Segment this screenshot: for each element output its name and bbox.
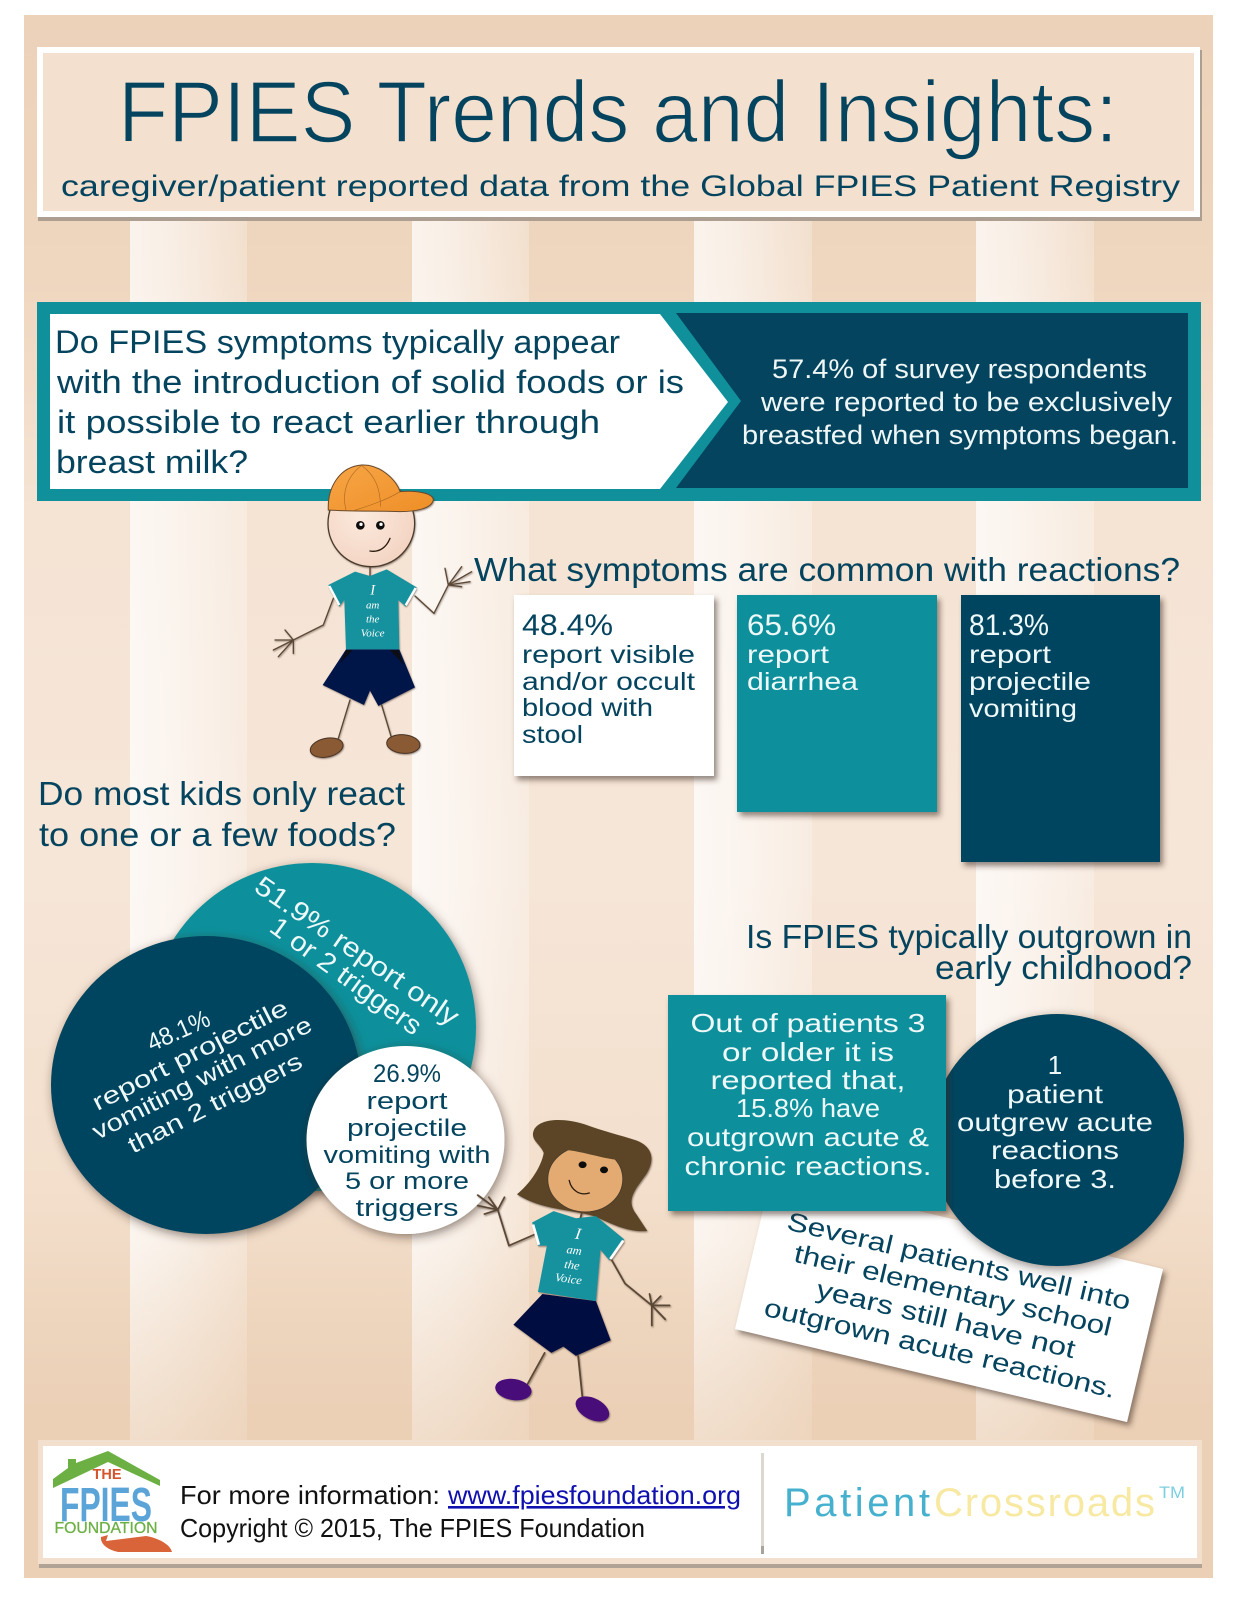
logo: The FPIES Foundation: FPIES (60, 1479, 152, 1532)
logo: PatientCrossroads (784, 1481, 1185, 1525)
illustration: girl character: am (566, 1242, 583, 1258)
bar: projectile vomiting 81.3% (961, 595, 1160, 862)
logo: PatientCrossroads: Crossroads (934, 1481, 1155, 1525)
question arrow panel: it possible to react earlier through (57, 404, 600, 440)
symptom bar chart (514, 595, 1160, 862)
logo: PatientCrossroads: Patient (784, 1481, 930, 1525)
heading: outgrown: Is FPIES typically outgrown in (746, 918, 1192, 955)
illustration: girl character: I (573, 1224, 584, 1243)
bar: projectile vomiting 81.3%: vomiting (969, 695, 1077, 723)
tilted note: elementary school years (735, 1176, 1163, 1422)
circle: 26.9% 5 or more triggers: vomiting with (324, 1142, 490, 1169)
illustration: boy character: I (369, 583, 376, 599)
circle: 51.9% 1 or 2 triggers (148, 863, 476, 1191)
box: 15.8% outgrown (668, 995, 946, 1211)
tilted note: elementary school years: outgrown acute reactions. (761, 1292, 1119, 1404)
circle: 26.9% 5 or more triggers: 5 or more (345, 1168, 469, 1195)
circle: 51.9% 1 or 2 triggers: 51.9% report only (249, 870, 465, 1032)
box: 15.8% outgrown: outgrown acute & (687, 1122, 929, 1152)
circle: 48.1% more than 2 triggers (51, 936, 361, 1234)
answer arrow panel (676, 313, 1188, 488)
logo: The FPIES Foundation: THE (92, 1466, 122, 1483)
footer panel (38, 1440, 1202, 1568)
contact text: Copyright © 2015, The FPIES Foundation (180, 1513, 645, 1543)
tilted note: elementary school years: Several patients well into (784, 1206, 1134, 1316)
circle: 1 patient outgrew before 3: reactions (991, 1135, 1119, 1165)
bar: blood in stool 48.4%: stool (522, 721, 583, 749)
box: 15.8% outgrown: reported that, (710, 1065, 906, 1095)
bar: blood in stool 48.4%: blood with (522, 694, 653, 722)
answer arrow panel: 57.4% of survey respondents (772, 354, 1147, 384)
heading: outgrown (746, 918, 1192, 986)
circle: 1 patient outgrew before 3: 1 (1048, 1050, 1062, 1080)
circle: 26.9% 5 or more triggers (306, 1046, 504, 1234)
bar: diarrhea 65.6% (737, 595, 937, 812)
circle: 26.9% 5 or more triggers: projectile (347, 1115, 467, 1142)
illustration: boy character: the (366, 614, 379, 626)
illustration: girl character (478, 1120, 670, 1427)
question arrow panel: Do FPIES symptoms typically appear (55, 324, 620, 360)
circle: 1 patient outgrew before 3: patient (1007, 1079, 1104, 1109)
circle: 26.9% 5 or more triggers: report (366, 1088, 448, 1115)
illustration: girl character: Voice (554, 1270, 583, 1287)
answer arrow panel: were reported to be exclusively (760, 387, 1173, 417)
bar: blood in stool 48.4%: report visible (522, 641, 695, 669)
illustration: boy character: am (366, 600, 379, 612)
box: 15.8% outgrown: 15.8% have (736, 1093, 880, 1123)
question arrow panel (50, 314, 728, 489)
question banner: breast milk (37, 302, 1201, 501)
illustration: girl character: the (563, 1257, 581, 1273)
box: 15.8% outgrown: Out of patients 3 (690, 1008, 926, 1038)
bar: diarrhea 65.6%: 65.6% (747, 609, 836, 642)
circle: 1 patient outgrew before 3 (930, 1014, 1184, 1266)
tilted note: elementary school years: their elementary school (791, 1238, 1115, 1342)
circle: 48.1% more than 2 triggers: 48.1% (143, 1005, 214, 1057)
title panel (37, 47, 1202, 221)
bar: blood in stool 48.4% (514, 595, 714, 776)
box: 15.8% outgrown: chronic reactions. (684, 1151, 932, 1181)
circle: 26.9% 5 or more triggers: triggers (356, 1195, 458, 1222)
circle: 26.9% 5 or more triggers: 26.9% (373, 1060, 441, 1088)
bar: projectile vomiting 81.3%: report (969, 641, 1051, 669)
circle: 1 patient outgrew before 3: before 3. (994, 1164, 1116, 1194)
answer arrow panel: breastfed when symptoms began. (742, 420, 1178, 450)
circle: 48.1% more than 2 triggers: than 2 triggers (124, 1048, 307, 1159)
title: FPIES Trends and Insights: (118, 64, 1118, 161)
bar: blood in stool 48.4%: 48.4% (522, 609, 613, 642)
circle: 48.1% more than 2 triggers: vomiting with more (88, 1011, 317, 1146)
heading: triggers: to one or a few foods? (39, 816, 396, 853)
tilted note: elementary school years: years still have not (814, 1274, 1079, 1364)
heading: triggers (38, 775, 405, 853)
circle: 1 patient outgrew before 3: outgrew acute (957, 1107, 1153, 1137)
circle: 51.9% 1 or 2 triggers: 1 or 2 triggers (264, 911, 428, 1041)
contact text (180, 1480, 741, 1543)
bar: blood in stool 48.4%: and/or occult (522, 668, 695, 696)
illustration: boy character: Voice (361, 628, 385, 640)
circle: 48.1% more than 2 triggers: report projectile (88, 994, 293, 1117)
illustration: boy character (273, 465, 472, 760)
heading: outgrown: early childhood? (935, 949, 1192, 986)
subtitle: caregiver/patient reported data from the Global FPIES Patient Registry (61, 170, 1180, 203)
bar: diarrhea 65.6%: diarrhea (747, 668, 858, 696)
bar: projectile vomiting 81.3%: 81.3% (969, 609, 1049, 642)
logo: PatientCrossroads: TM (1159, 1483, 1185, 1502)
heading: symptoms: What symptoms are common with reactions? (474, 551, 1180, 588)
bar: diarrhea 65.6%: report (747, 641, 829, 669)
box: 15.8% outgrown: or older it is (722, 1037, 894, 1067)
bar: projectile vomiting 81.3%: projectile (969, 668, 1091, 696)
question arrow panel: breast milk? (56, 444, 248, 480)
question arrow panel: with the introduction of solid foods or is (56, 364, 684, 400)
logo: The FPIES Foundation (53, 1451, 172, 1552)
heading: triggers: Do most kids only react (38, 775, 405, 812)
logo: The FPIES Foundation: FOUNDATION (54, 1520, 158, 1537)
contact text: www.fpiesfoundation.org (447, 1480, 741, 1510)
contact text: For more information: (180, 1480, 440, 1510)
